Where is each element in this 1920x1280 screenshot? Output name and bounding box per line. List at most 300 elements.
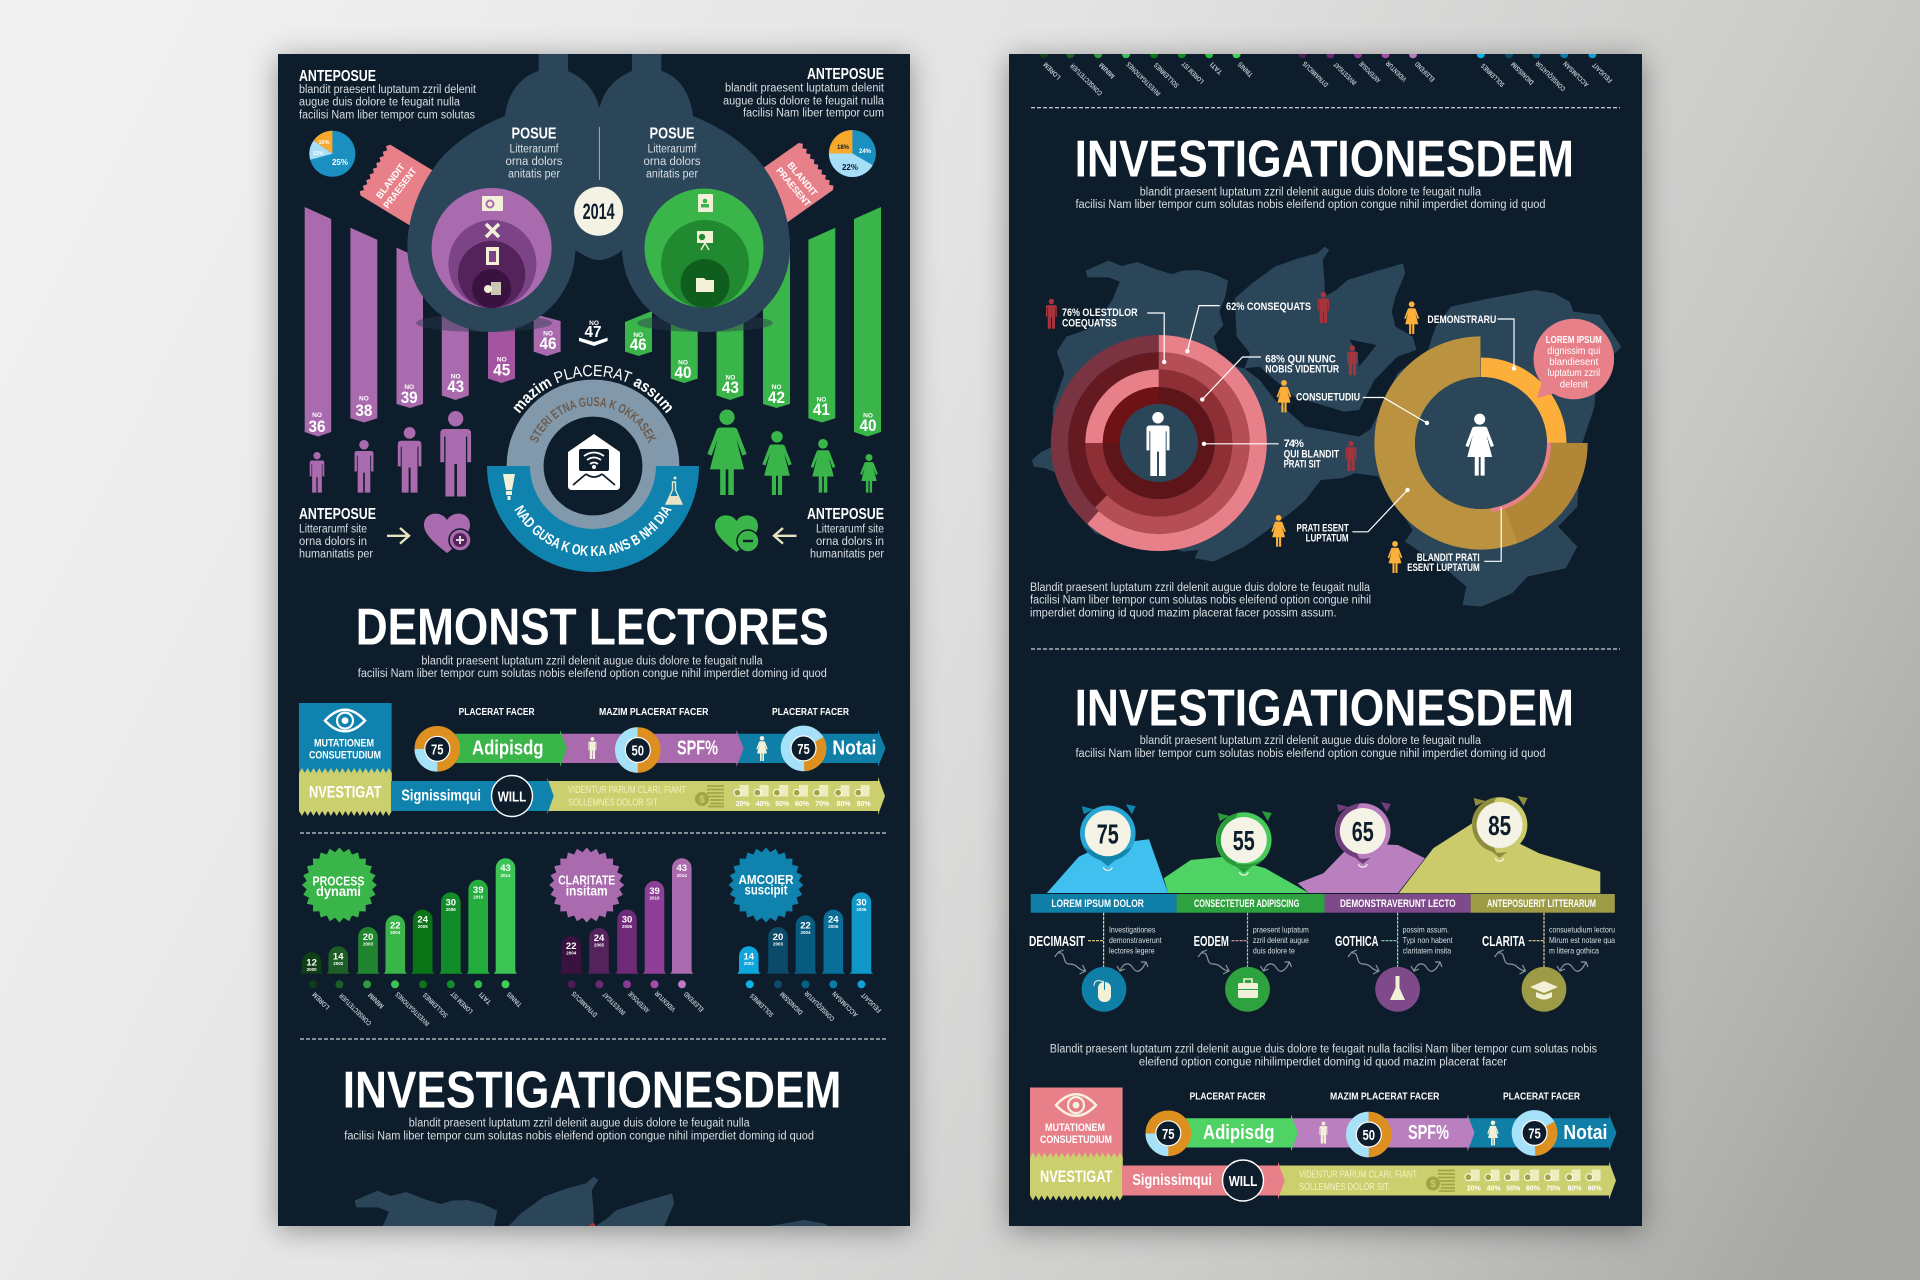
subtitle: right second bbox=[1076, 735, 1546, 760]
right panel: rotated labels: DYNAMICUS bbox=[1302, 59, 1330, 88]
bar chart: green: 12 bbox=[306, 957, 317, 968]
arc labels: mazim PLACERAT assum bbox=[513, 365, 672, 414]
callout bubble: blandiesent bbox=[1549, 356, 1598, 368]
panel: left poster bbox=[278, 54, 910, 1226]
bar chart: green: 20 bbox=[363, 932, 373, 943]
panel: right poster bbox=[1009, 54, 1642, 1226]
icon: graduation cap bbox=[1530, 981, 1558, 1000]
bar labels: purple: INVESTIGAT bbox=[602, 990, 627, 1016]
arrow band: green bbox=[437, 730, 567, 767]
subtitle: right top bbox=[1076, 186, 1546, 211]
bar chart: blue: 2006 bbox=[856, 907, 867, 912]
text: lower right: humanitatis per bbox=[810, 548, 884, 560]
map labels: 68% QUI NUNC bbox=[1265, 354, 1336, 366]
bar labels: green: MINIM bbox=[367, 991, 386, 1009]
will badge bbox=[492, 776, 532, 816]
title: investigationesdem right second: INVESTIGATIONESDEM bbox=[1075, 679, 1574, 737]
body text: second section: Blandit praesent luptatum zzril delenit augue duis dolore te feugait nulla facilisi Nam liber tempor cum solutas nobis bbox=[1050, 1044, 1597, 1056]
pie chart: left: 25% bbox=[332, 158, 348, 167]
bar chart: green: 2006 bbox=[446, 907, 456, 912]
mountains bbox=[1047, 822, 1600, 893]
callout bubble: delenit bbox=[1560, 378, 1588, 390]
ribbon: blandit right bbox=[759, 143, 834, 224]
icon: camera bbox=[482, 196, 503, 211]
band text: Adipisdg bbox=[1203, 1122, 1274, 1144]
column: eodem: duis dolore te bbox=[1253, 945, 1295, 955]
map body text bbox=[1030, 582, 1371, 619]
bar values: NO bbox=[312, 412, 322, 419]
header text: top right: facilisi Nam liber tempor cum bbox=[743, 108, 884, 120]
badge: process dynami: PROCESS bbox=[312, 874, 365, 888]
icon: flask bbox=[1390, 976, 1405, 1000]
map figures: yellow bbox=[1271, 301, 1419, 573]
band text: Notai bbox=[1563, 1122, 1607, 1144]
bar values: 39 bbox=[401, 388, 418, 407]
bar chart: purple: 2005 bbox=[594, 942, 605, 948]
icon: money bbox=[484, 282, 501, 295]
banner block 1 bbox=[299, 703, 886, 816]
header text: top right: blandit praesent luptatum delenit bbox=[725, 82, 885, 94]
bar labels: blue: ACCUMSAN bbox=[831, 990, 860, 1018]
header text: top right: ANTEPOSUE bbox=[807, 66, 884, 83]
percent bills: 20% bbox=[1467, 1186, 1481, 1192]
posue text left: orna dolors bbox=[506, 156, 563, 168]
eye box pink: CONSUETUDIUM bbox=[1040, 1134, 1112, 1146]
column: clarita: consuetudium lectoru bbox=[1549, 925, 1615, 935]
marker: no 47 bbox=[579, 320, 608, 346]
pin 85 bbox=[1472, 796, 1528, 861]
bar chart: blue: 20 bbox=[773, 932, 783, 943]
bar labels: blue bbox=[749, 989, 883, 1022]
bar labels: blue: DIGNISSIM bbox=[779, 990, 805, 1016]
percent bills bbox=[1465, 1170, 1602, 1192]
band note: VIDENTUR PARUM CLARI, FIANT bbox=[568, 785, 686, 796]
icon: coin stack: $ bbox=[1430, 1179, 1436, 1190]
bar labels: purple: VIDENTUR bbox=[654, 989, 677, 1013]
donut 50: 50 bbox=[632, 742, 644, 760]
bar labels: blue: SOLLEMNES bbox=[749, 992, 775, 1018]
pie chart: right bbox=[829, 130, 876, 177]
text: lower left bbox=[299, 506, 376, 560]
pin 65: 65 bbox=[1352, 816, 1374, 847]
bar chart: green: 2004 bbox=[390, 930, 401, 935]
header text: top left: facilisi Nam liber tempor cum solutas bbox=[299, 109, 475, 121]
bar values: NO bbox=[633, 332, 643, 339]
map labels bbox=[1062, 301, 1496, 574]
subtitle: demonst: blandit praesent luptatum zzril delenit augue duis dolore te feugait nulla bbox=[421, 655, 763, 667]
pin 85: 85 bbox=[1488, 810, 1511, 841]
will badge bbox=[1222, 1160, 1264, 1201]
pie chart: right: 22% bbox=[842, 163, 858, 172]
column: gothica: GOTHICA bbox=[1335, 933, 1379, 950]
column: eodem: EODEM bbox=[1194, 933, 1229, 950]
bar chart: purple bbox=[559, 858, 694, 988]
bar chart: green: 2003 bbox=[363, 942, 374, 946]
badge: process dynami: dynami bbox=[316, 883, 361, 899]
band note bbox=[568, 785, 686, 808]
percent bills: 80% bbox=[1567, 1186, 1582, 1192]
percent bills: 20% bbox=[736, 801, 750, 808]
percent bills: 70% bbox=[815, 801, 830, 808]
divider line in binocular bbox=[598, 127, 600, 180]
bar values: 41 bbox=[813, 400, 830, 419]
column labels bbox=[1190, 1090, 1580, 1102]
percent bills: 70% bbox=[1546, 1186, 1561, 1192]
bar labels: green: LOREM IST bbox=[450, 989, 475, 1015]
bar values: 38 bbox=[355, 401, 372, 420]
bar values: 46 bbox=[540, 334, 556, 353]
map labels: 62% CONSEQUATS bbox=[1226, 301, 1311, 313]
pin 55 bbox=[1216, 811, 1272, 875]
nested circles: green bbox=[644, 188, 764, 308]
bar chart: blue: 30 bbox=[856, 897, 867, 908]
column labels: PLACERAT FACER bbox=[1503, 1090, 1580, 1102]
bar values: 43 bbox=[447, 377, 464, 396]
arrow band: blue bbox=[1468, 1114, 1616, 1152]
subtitle: investigationes left: blandit praesent luptatum zzril delenit augue duis dolore te feugait nulla bbox=[409, 1118, 750, 1130]
column labels: PLACERAT FACER bbox=[1190, 1090, 1266, 1102]
ribbon: blandit right: PRAESENT bbox=[773, 165, 813, 209]
bar labels: purple: ANTEPOSUE bbox=[627, 989, 651, 1014]
bar chart: purple: 2004 bbox=[566, 950, 577, 956]
bar values: 46 bbox=[630, 335, 647, 354]
shadows under binocular bbox=[416, 314, 773, 332]
percent bills: 90% bbox=[1588, 1186, 1602, 1192]
icon: clipboard bbox=[486, 247, 499, 265]
bar chart: purple: 22 bbox=[566, 941, 576, 952]
bar chart: green: 2000 bbox=[307, 967, 317, 972]
category band: LOREM IPSUM DOLOR bbox=[1051, 898, 1144, 910]
column: eodem: praesent luptatum bbox=[1253, 925, 1309, 935]
pin 75: 75 bbox=[1097, 818, 1119, 849]
column: decimasit: demonstraverunt bbox=[1109, 935, 1162, 945]
bar chart: green: 2002 bbox=[333, 961, 344, 966]
header text: top right: augue duis dolore te feugait nulla bbox=[723, 95, 885, 107]
arrow band: green bbox=[1168, 1114, 1298, 1152]
band text: SPF% bbox=[677, 738, 718, 760]
eye box pink: MUTATIONEM bbox=[1045, 1122, 1105, 1134]
column: clarita bbox=[1482, 913, 1615, 1012]
arrow band: olive bbox=[548, 777, 885, 815]
bar labels: green: LOREM bbox=[312, 990, 331, 1010]
leader lines bbox=[1147, 306, 1514, 561]
olive label bbox=[299, 768, 392, 816]
map body text: Blandit praesent luptatum zzril delenit augue duis dolore te feugait nulla bbox=[1030, 582, 1371, 594]
icon: heart minus bbox=[715, 515, 759, 552]
people: purple bbox=[310, 411, 471, 496]
map labels: PRATI ESENT bbox=[1296, 522, 1349, 534]
right panel: rotated labels: TATI bbox=[1209, 60, 1224, 75]
bar chart: blue: 2002 bbox=[744, 961, 754, 966]
marker: no 47: 47 bbox=[584, 324, 602, 341]
icon: envelope with wifi bbox=[568, 434, 620, 490]
map fragment: left panel bbox=[354, 1177, 829, 1226]
icon: male bbox=[588, 737, 596, 759]
nested circles: purple bbox=[432, 188, 552, 308]
map bbox=[1032, 247, 1621, 607]
pin 65 bbox=[1335, 802, 1391, 867]
arrow band: blue bbox=[737, 730, 886, 767]
bar values: NO bbox=[404, 384, 414, 391]
right panel: cut-off dots bbox=[1040, 54, 1596, 58]
bar values: 45 bbox=[493, 360, 510, 380]
bar values: NO bbox=[726, 375, 735, 382]
signissimqui label: Signissimqui bbox=[1132, 1172, 1212, 1189]
subtitle: investigationes left bbox=[344, 1118, 814, 1142]
bar labels: green: SOLLEMNES bbox=[422, 991, 450, 1019]
bar values: NO bbox=[359, 396, 369, 403]
callout bubble: luptatum zzril bbox=[1548, 367, 1600, 379]
will badge: WILL bbox=[1229, 1173, 1257, 1190]
posue text right: Litterarumf bbox=[648, 143, 697, 155]
category band: ANTEPOSUERIT LITTERARUM bbox=[1487, 898, 1596, 910]
column: clarita: Mirum est notare qua bbox=[1549, 935, 1615, 945]
column: clarita: m littera gothica bbox=[1549, 945, 1599, 955]
percent bills: 80% bbox=[836, 801, 851, 808]
right panel: rotated labels: ELEIFEND bbox=[1414, 60, 1437, 83]
eye box: CONSUETUDIUM bbox=[309, 750, 381, 762]
map labels: DEMONSTRARU bbox=[1427, 314, 1496, 326]
badge: claritate: insitam bbox=[566, 882, 608, 898]
bar values: NO bbox=[678, 360, 688, 367]
bar values: 40 bbox=[674, 363, 692, 382]
bar chart: green: 22 bbox=[390, 920, 401, 931]
donut 50 bbox=[1351, 1117, 1387, 1152]
leader dots bbox=[1162, 349, 1516, 492]
arrow band: pink row 2 bbox=[1122, 1162, 1285, 1200]
right panel: rotated labels: CONSEQUATUR bbox=[1535, 59, 1567, 92]
right panel: rotated labels: DIGNISSIM bbox=[1510, 60, 1536, 86]
header text: top left bbox=[299, 68, 477, 121]
ribbon: blandit left: BLANDIT bbox=[374, 162, 408, 201]
band note: SOLLEMNES DOLOR SIT. bbox=[1299, 1182, 1390, 1193]
bar chart: purple: 39 bbox=[649, 886, 660, 897]
right panel: rotated labels: TINNIS bbox=[1237, 60, 1255, 78]
text: lower left: humanitatis per bbox=[299, 548, 373, 560]
map labels: 74% bbox=[1284, 438, 1304, 450]
title: demonst lectores: DEMONST LECTORES bbox=[356, 598, 829, 656]
band note: SOLLEMNES DOLOR SIT. bbox=[568, 798, 659, 808]
pie chart: left: 12% bbox=[312, 151, 324, 157]
subtitle: right top: facilisi Nam liber tempor cum solutas nobis eleifend option congue nihil imperdiet doming id quod bbox=[1076, 199, 1546, 211]
body text: second section: eleifend option congue nihilimperdiet doming id quod mazim placerat facer bbox=[1139, 1057, 1507, 1069]
posue text right: orna dolors bbox=[644, 156, 701, 168]
will badge: WILL bbox=[498, 788, 526, 806]
badge: claritate: CLARITATE bbox=[558, 873, 615, 888]
posue text left bbox=[506, 126, 563, 180]
bar chart: green: 30 bbox=[446, 897, 456, 908]
right panel: rotated labels: FEUGAIT bbox=[1591, 60, 1614, 84]
bars: purple bbox=[305, 207, 561, 436]
text: lower right bbox=[807, 506, 884, 560]
bar chart: green: 2005 bbox=[418, 924, 428, 929]
bar labels: green: INVESTIGATIONES bbox=[394, 990, 431, 1027]
pie chart: left: 10% bbox=[318, 140, 330, 146]
column: clarita: CLARITA bbox=[1482, 933, 1525, 950]
icon: folder bbox=[696, 278, 714, 292]
column labels: MAZIM PLACERAT FACER bbox=[599, 706, 709, 718]
bar labels: blue: CONSEQUATUR bbox=[804, 989, 836, 1022]
subtitle: right second: blandit praesent luptatum zzril delenit augue duis dolore te feugait nulla bbox=[1140, 735, 1482, 747]
olive label: NVESTIGAT bbox=[309, 782, 382, 801]
bar chart: green bbox=[300, 858, 518, 988]
bar labels: green bbox=[312, 989, 524, 1027]
bar values: NO bbox=[863, 413, 873, 420]
icon: mouse bbox=[1094, 981, 1111, 1002]
donut 75: 75 bbox=[1162, 1126, 1175, 1143]
text: lower left: Litterarumf site bbox=[299, 523, 367, 535]
bar labels: green: TINNIS bbox=[506, 990, 524, 1008]
percent bills bbox=[734, 785, 871, 808]
donut 75 b bbox=[779, 724, 828, 773]
badge: amcoier bbox=[728, 848, 804, 922]
bar values: 36 bbox=[308, 417, 326, 436]
right panel: rotated labels: INVESTIGAT bbox=[1333, 60, 1358, 86]
map labels: 76% OLESTDLOR bbox=[1062, 307, 1138, 319]
posue text right: anitatis per bbox=[646, 168, 698, 180]
badge: amcoier: suscipit bbox=[744, 882, 788, 898]
bar labels: purple bbox=[571, 989, 706, 1018]
donut: male rings bbox=[1059, 344, 1258, 542]
bar values: NO bbox=[497, 356, 507, 364]
subtitle: right top: blandit praesent luptatum zzril delenit augue duis dolore te feugait nulla bbox=[1140, 186, 1482, 198]
column labels: PLACERAT FACER bbox=[459, 706, 535, 718]
percent bills: 40% bbox=[756, 801, 770, 808]
pie chart: right: 24% bbox=[859, 149, 872, 155]
arrow: left bbox=[774, 528, 796, 544]
bar labels: purple: ELEIFEND bbox=[683, 990, 706, 1013]
callout bubble: LOREM IPSUM bbox=[1546, 334, 1602, 346]
icon: pencils bbox=[486, 224, 499, 237]
band text bbox=[472, 738, 876, 760]
posue text right bbox=[644, 126, 701, 180]
donut 75 b bbox=[1510, 1108, 1559, 1157]
column: gothica: Typi non habent bbox=[1403, 935, 1453, 945]
body text: second section bbox=[1050, 1044, 1597, 1069]
map body text: facilisi Nam liber tempor cum solutas nobis eleifend option congue nihil bbox=[1030, 594, 1371, 606]
column labels: PLACERAT FACER bbox=[772, 706, 849, 718]
right panel: rotated labels: SOLLEMNES bbox=[1153, 61, 1181, 89]
column labels: MAZIM PLACERAT FACER bbox=[1330, 1090, 1440, 1102]
category band: CONSECTETUER ADIPISCING bbox=[1194, 898, 1299, 910]
map labels: NOBIS VIDENTUR bbox=[1265, 364, 1339, 376]
bar values bbox=[308, 330, 876, 436]
posue text right: POSUE bbox=[650, 126, 695, 143]
arrow band: purple bbox=[560, 730, 744, 767]
bar values: NO bbox=[451, 374, 461, 381]
header text: top left: blandit praesent luptatum zzril delenit bbox=[299, 84, 477, 96]
right panel: rotated labels bbox=[1043, 59, 1614, 97]
subtitle: right second: facilisi Nam liber tempor cum solutas nobis eleifend option congue nihil imperdiet doming id quod bbox=[1076, 748, 1546, 760]
bar chart: green: 2014 bbox=[500, 873, 511, 878]
band note: VIDENTUR PARUM CLARI, FIANT bbox=[1299, 1170, 1417, 1180]
donut 75 bbox=[419, 731, 455, 767]
icon: coin stack: $ bbox=[699, 794, 705, 806]
bar chart: purple: 24 bbox=[594, 933, 605, 944]
bar chart: blue: 14 bbox=[744, 951, 755, 962]
olive label bbox=[1030, 1152, 1123, 1200]
category band: DEMONSTRAVERUNT LECTO bbox=[1340, 898, 1456, 910]
icon: female bbox=[756, 736, 768, 761]
olive label: NVESTIGAT bbox=[1040, 1167, 1113, 1186]
title: investigationesdem right top: INVESTIGATIONESDEM bbox=[1075, 130, 1574, 188]
map figures: red bbox=[1046, 292, 1358, 471]
bar chart: blue: 2005 bbox=[828, 924, 839, 929]
band text: Notai bbox=[832, 738, 876, 760]
text: lower right: Litterarumf site bbox=[816, 523, 884, 535]
map labels: ESENT LUPTATUM bbox=[1407, 562, 1480, 574]
arrow band: olive bbox=[1279, 1162, 1616, 1200]
icon: presentation bbox=[697, 231, 713, 250]
year badge: 2014 bbox=[583, 199, 615, 224]
pie chart: left bbox=[309, 131, 355, 177]
icon: bulb bbox=[503, 474, 515, 500]
bar chart: purple: 43 bbox=[677, 863, 687, 874]
bar values: 43 bbox=[722, 378, 739, 397]
bar values: 42 bbox=[768, 388, 785, 407]
column labels bbox=[459, 706, 849, 718]
icon: male bbox=[1319, 1122, 1327, 1144]
bar values: NO bbox=[543, 330, 553, 338]
posue text left: Litterarumf bbox=[510, 143, 559, 155]
column: gothica: claritatem insita bbox=[1403, 945, 1451, 955]
band text bbox=[1203, 1122, 1607, 1144]
subtitle: investigationes left: facilisi Nam liber tempor cum solutas nobis eleifend option congue nihil imperdiet doming id quod bbox=[344, 1130, 814, 1142]
column: eodem bbox=[1194, 913, 1309, 1012]
bar chart: blue: 2003 bbox=[773, 942, 784, 946]
bar chart: purple: 2014 bbox=[677, 873, 687, 878]
donut 75 b: 75 bbox=[1528, 1126, 1541, 1142]
right panel: rotated labels: ANTEPOSUE bbox=[1358, 59, 1382, 84]
ribbon: blandit left: PRAESENT bbox=[382, 166, 419, 211]
column: decimasit: Investigationes bbox=[1109, 925, 1155, 935]
icon: heart plus bbox=[424, 514, 471, 553]
header text: top right bbox=[723, 66, 885, 120]
text: lower left: orna dolors in bbox=[299, 536, 367, 548]
band text: Adipisdg bbox=[472, 738, 544, 760]
bars: green bbox=[625, 207, 881, 436]
center badge: blue half ring bbox=[487, 380, 699, 572]
posue text left: anitatis per bbox=[508, 168, 560, 180]
pie chart: right: 18% bbox=[837, 145, 850, 151]
band note bbox=[1299, 1170, 1417, 1193]
binocular body bbox=[407, 54, 790, 332]
percent bills: 60% bbox=[795, 801, 810, 808]
icon: coin stack bbox=[1426, 1170, 1455, 1191]
arc labels: NAD GUSA K OK KA ANS B NHI DIA bbox=[514, 504, 672, 556]
signissimqui label: Signissimqui bbox=[401, 788, 481, 805]
text: lower left: ANTEPOSUE bbox=[299, 506, 376, 523]
bar labels: green: CONSECTETUER bbox=[338, 992, 373, 1026]
column: gothica bbox=[1335, 913, 1453, 1012]
callout bubble bbox=[1534, 319, 1614, 399]
bar chart: blue: 22 bbox=[800, 920, 811, 931]
map labels: COEQUATSS bbox=[1062, 317, 1117, 329]
map labels: QUI BLANDIT bbox=[1284, 449, 1339, 461]
icon: briefcase bbox=[1238, 979, 1258, 998]
arrow band: purple bbox=[1291, 1114, 1474, 1152]
column: decimasit bbox=[1029, 913, 1162, 1012]
eye box bbox=[299, 703, 392, 775]
bar chart: green: 24 bbox=[417, 915, 429, 926]
bar chart: green: 14 bbox=[333, 951, 344, 962]
arc labels: STERI ETNA GUSA K OKKASEK bbox=[530, 397, 657, 444]
header text: top left: augue duis dolore te feugait nulla bbox=[299, 96, 461, 108]
right panel: rotated labels: LOREM bbox=[1043, 60, 1062, 80]
ribbon: blandit right: BLANDIT bbox=[785, 160, 819, 199]
bar chart: purple: 30 bbox=[622, 915, 632, 926]
map labels: BLANDIT PRATI bbox=[1417, 552, 1480, 564]
